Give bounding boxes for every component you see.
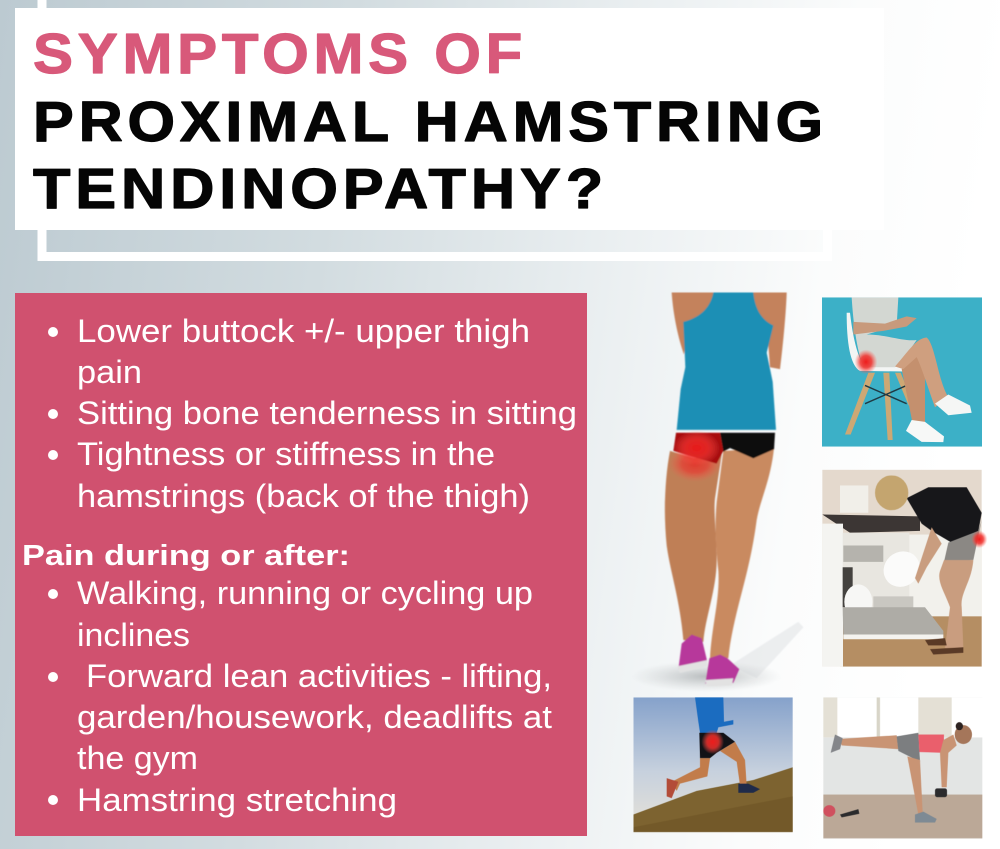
title frame outline	[42, 0, 828, 256]
panel: symptoms list	[15, 293, 587, 836]
photo: single-leg deadlift	[823, 697, 982, 838]
title line: proximal hamstring: PROXIMAL HAMSTRING	[33, 90, 828, 154]
bullet: lower buttock pain: pain	[77, 354, 142, 390]
bullet: tightness or stiffness	[48, 436, 530, 514]
bullet: forward lean activities: Forward lean activities - lifting,	[86, 658, 552, 694]
bullet: walking running cycling: inclines	[77, 617, 190, 653]
bullet: sitting bone tenderness: Sitting bone tenderness in sitting	[77, 395, 577, 431]
bullet: walking running cycling: Walking, running or cycling up	[77, 575, 533, 611]
photo: runner on hill	[633, 697, 793, 832]
photo: standing woman from behind	[632, 293, 803, 692]
photos group	[632, 293, 987, 838]
title banner	[15, 8, 884, 230]
bullet: tightness or stiffness: hamstrings (back of the thigh)	[77, 478, 530, 514]
bullet: forward lean activities: the gym	[77, 740, 198, 776]
bullet: hamstring stretching: Hamstring stretching	[77, 782, 397, 818]
title line: tendinopathy: TENDINOPATHY?	[33, 157, 608, 221]
subheading: pain during or after: Pain during or after:	[22, 540, 350, 572]
bullet: lower buttock pain: Lower buttock +/- upper thigh	[77, 313, 530, 349]
photo: woman loading dishwasher	[822, 470, 987, 667]
title line: symptoms of: SYMPTOMS OF	[33, 22, 527, 86]
photo: woman sitting on chair	[822, 297, 982, 447]
bullet: forward lean activities	[48, 658, 552, 776]
bullet: forward lean activities: garden/housework, deadlifts at	[77, 699, 552, 735]
bullet: tightness or stiffness: Tightness or stiffness in the	[77, 436, 495, 472]
bullet: lower buttock pain	[48, 313, 530, 390]
bullet: walking running cycling	[48, 575, 533, 653]
